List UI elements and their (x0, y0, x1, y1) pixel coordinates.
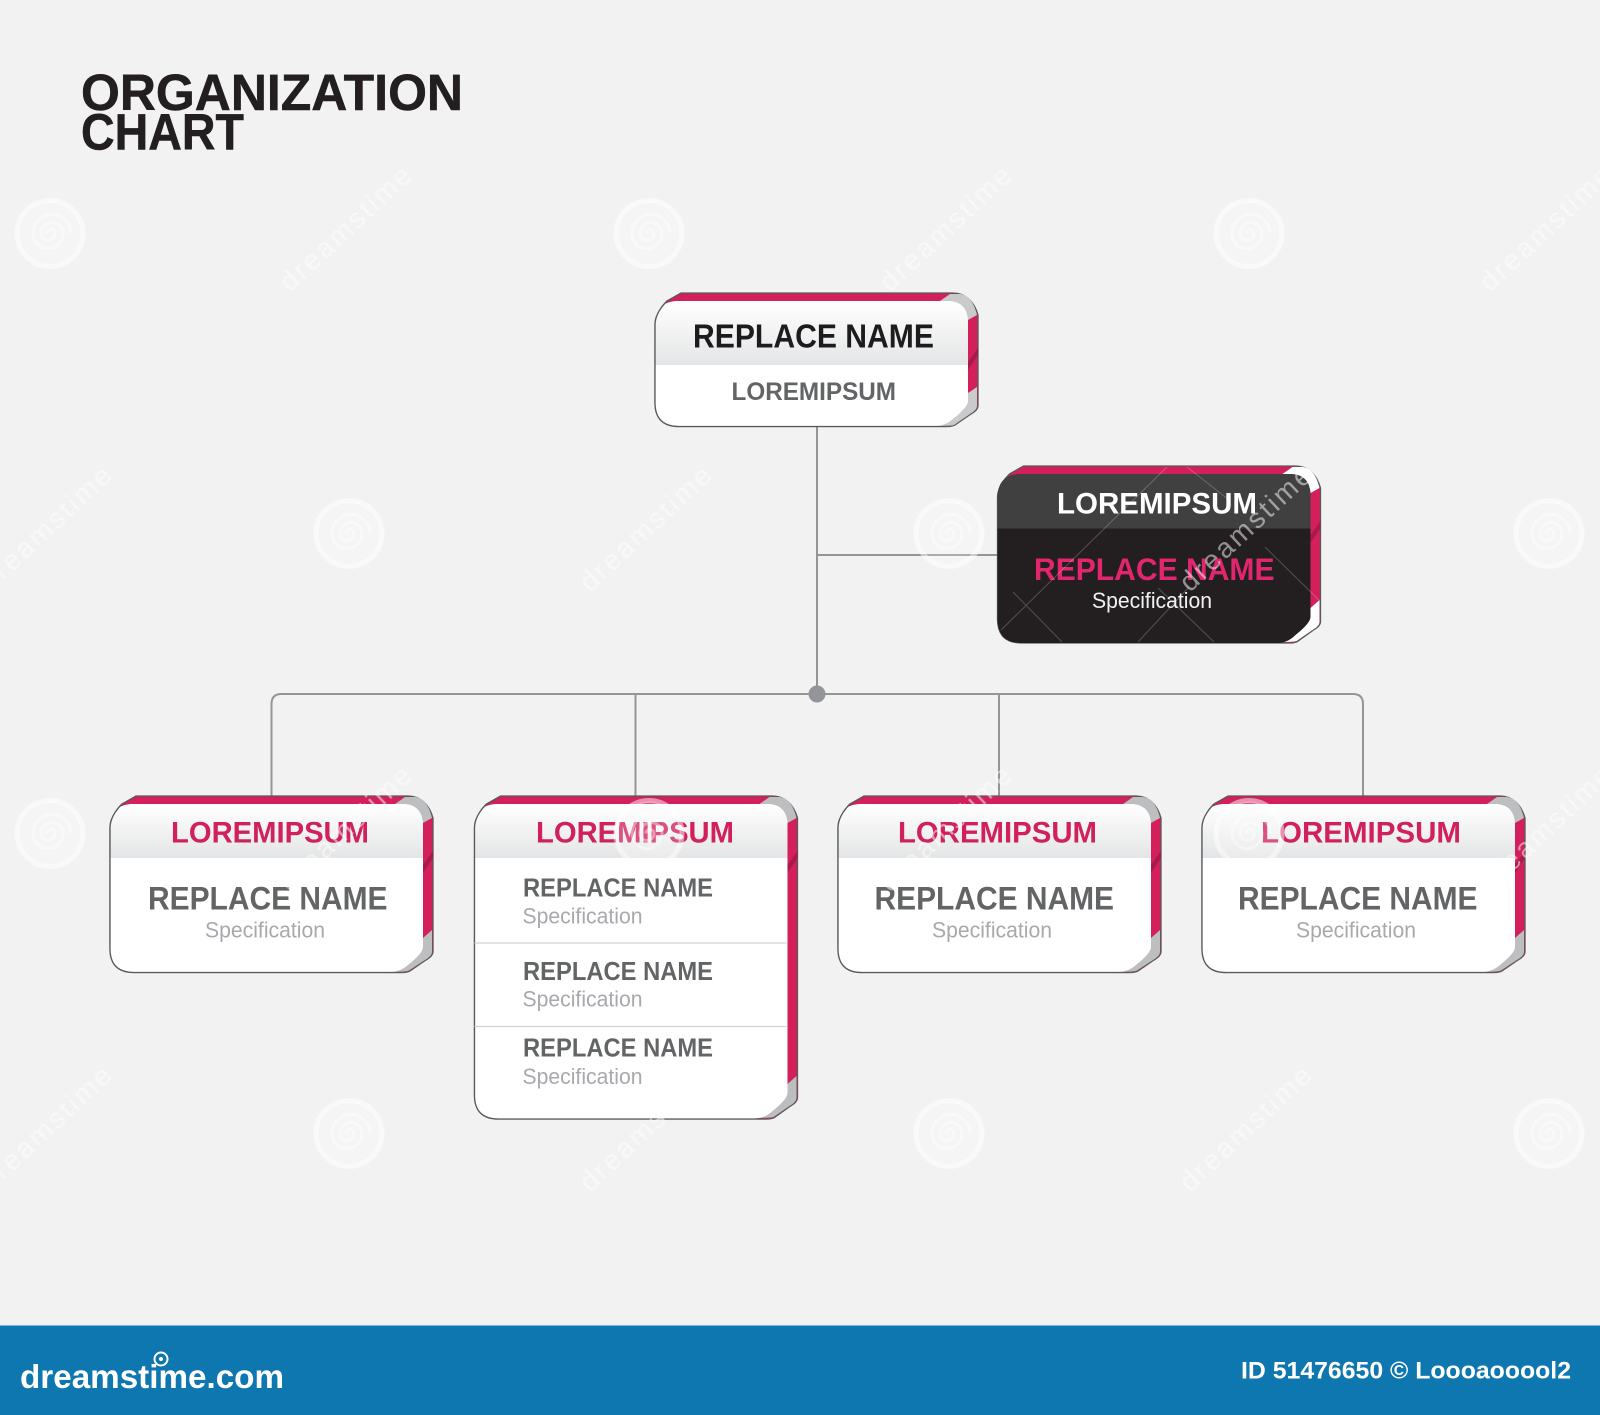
card: department 4: Specification (1296, 917, 1416, 942)
card: department 2 with list: LOREMIPSUM (536, 817, 734, 850)
watermark hairlines on dark card (1001, 467, 1319, 642)
card: top executive: LOREMIPSUM (732, 378, 896, 406)
title: CHART (81, 104, 244, 160)
footer band (0, 1326, 1600, 1415)
list item 3: REPLACE NAME (523, 1033, 713, 1063)
card: department 1: REPLACE NAME (148, 880, 388, 916)
list item 2: REPLACE NAME (523, 956, 713, 986)
card: department 2 with list (474, 796, 798, 1119)
card: department 3: LOREMIPSUM (898, 817, 1097, 850)
watermark text: dreamstime (273, 758, 419, 897)
card: department 1: Specification (205, 917, 325, 942)
watermark text (0, 158, 1600, 1197)
watermark text: dreamstime (1173, 1058, 1319, 1197)
card: assistant (dark): Specification (1092, 588, 1212, 613)
list item 2: Specification (522, 987, 642, 1012)
connector junction dot (808, 686, 826, 702)
card: department 3: Specification (932, 917, 1052, 942)
connector lines (272, 426, 1363, 796)
watermark text: dreamstime (573, 458, 719, 597)
footer logo: dreamstime.com (20, 1358, 284, 1395)
card: department 4: REPLACE NAME (1238, 880, 1478, 916)
watermark text: dreamstime (573, 1058, 719, 1197)
footer image id: ID 51476650 © Loooaooool2 (1241, 1358, 1571, 1385)
list item 1 (522, 873, 713, 928)
card: department 4 (1202, 796, 1525, 972)
watermark text: dreamstime (873, 758, 1019, 897)
card: assistant (dark) (998, 466, 1320, 643)
list item 3: Specification (522, 1064, 642, 1089)
card: department 3: REPLACE NAME (874, 880, 1114, 916)
list item 1: Specification (522, 903, 642, 928)
card: department 3 (838, 796, 1161, 972)
card: top executive (655, 293, 978, 426)
card: department 1: LOREMIPSUM (171, 817, 369, 850)
watermark text: dreamstime (273, 158, 419, 297)
watermark text: dreamstime (873, 158, 1019, 297)
watermark text: dreamstime (1173, 458, 1319, 597)
card: assistant (dark): LOREMIPSUM (1057, 488, 1257, 520)
card: assistant (dark): REPLACE NAME (1034, 551, 1274, 587)
list item 3 (522, 1033, 713, 1089)
title (81, 64, 463, 160)
card: department 1 (110, 796, 433, 972)
watermark spirals (17, 200, 1582, 1166)
card: department 4: LOREMIPSUM (1261, 817, 1461, 850)
list item 2 (522, 956, 713, 1012)
card: top executive: REPLACE NAME (693, 318, 934, 356)
title: ORGANIZATION (81, 64, 463, 121)
list item 1: REPLACE NAME (523, 873, 713, 903)
